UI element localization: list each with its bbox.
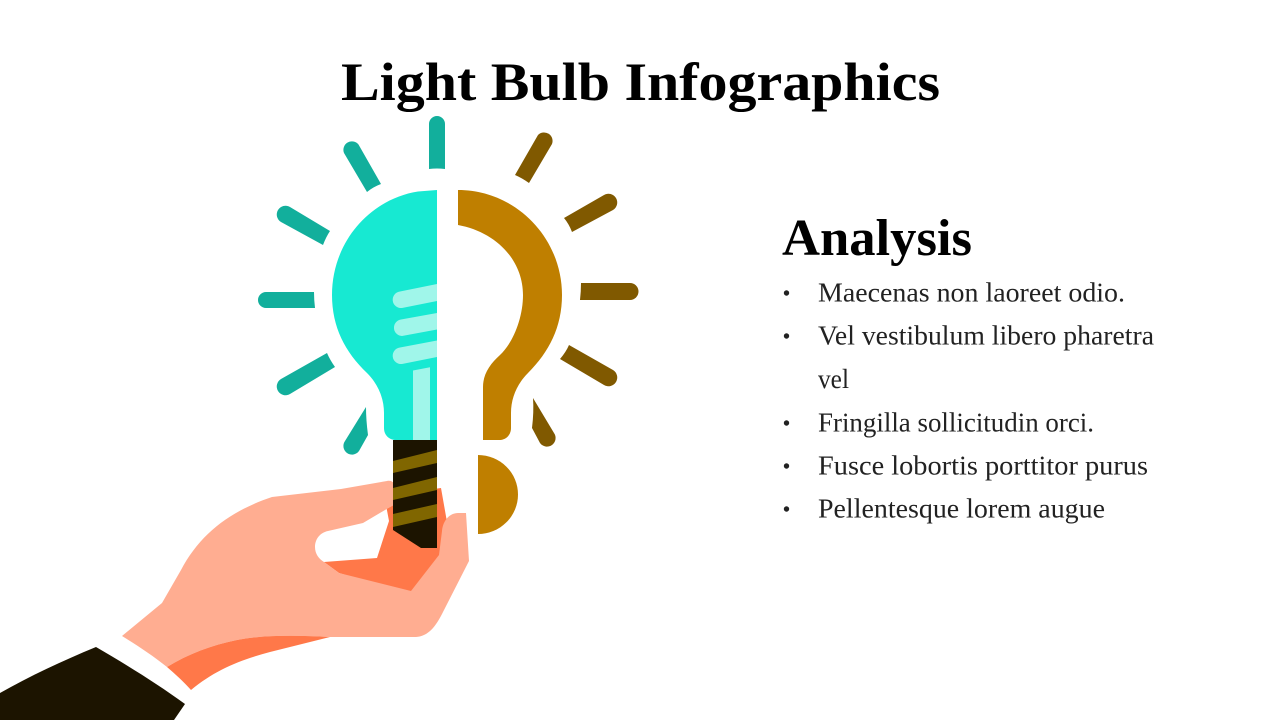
panel: analysis <box>782 210 1154 524</box>
bullet 3: Fringilla sollicitudin orci. <box>818 406 1094 438</box>
sleeve lining <box>167 636 330 690</box>
bullet 2: Vel vestibulum libero pharetra <box>818 320 1154 350</box>
bullet 4: Fusce lobortis porttitor purus <box>818 450 1148 480</box>
illustration: hand holding split light bulb <box>0 116 638 720</box>
inner palm shadow <box>324 488 447 595</box>
bullet 1: Maecenas non laoreet odio. <box>818 276 1125 308</box>
title: Light Bulb Infographics <box>341 52 940 112</box>
icon: left rays <box>258 116 445 455</box>
hand <box>0 481 469 720</box>
question mark dot <box>478 455 518 534</box>
icon: teal bulb half <box>332 190 437 440</box>
bullet 2 <box>784 320 1154 394</box>
bullet 2: vel <box>818 363 849 394</box>
filament <box>393 284 437 440</box>
bullet 5: Pellentesque lorem augue <box>818 492 1105 524</box>
icon: bulb screw base <box>393 440 437 548</box>
icon: right rays <box>515 132 638 447</box>
hand shape <box>122 481 469 667</box>
jacket cuff <box>0 647 185 720</box>
heading: Analysis <box>782 210 972 267</box>
icon: gold question mark bulb half <box>458 190 562 534</box>
bullet list <box>784 276 1154 524</box>
